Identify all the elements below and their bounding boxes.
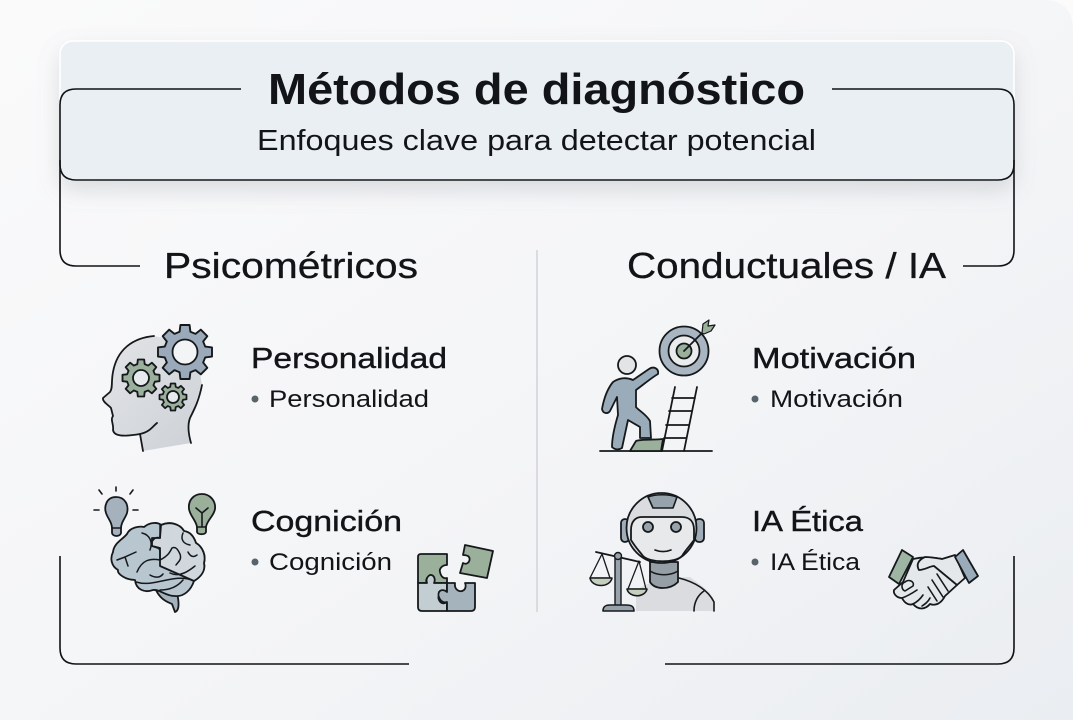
subtitle: Enfoques clave para detectar potencial xyxy=(257,125,816,157)
icon: brain with light bulbs xyxy=(94,487,215,612)
left frame line xyxy=(60,160,140,266)
ground line xyxy=(600,450,712,452)
green top-left piece xyxy=(418,554,447,583)
item title: Personalidad: Personalidad xyxy=(251,343,447,375)
mouth xyxy=(655,550,671,552)
face plate xyxy=(631,517,694,561)
torso xyxy=(636,577,714,611)
scales xyxy=(590,552,647,611)
grey bottom-right piece xyxy=(438,583,475,611)
body xyxy=(602,368,658,449)
green cuff xyxy=(889,550,913,584)
step xyxy=(630,439,663,451)
icon: head with gears xyxy=(103,325,212,451)
item title: Cognición: Cognición xyxy=(251,506,402,538)
eyes xyxy=(643,522,653,532)
icon: climber reaching target xyxy=(600,320,715,451)
item bullet: Motivación: Motivación xyxy=(770,386,903,413)
ears xyxy=(621,519,629,542)
bottom right frame line xyxy=(665,556,1014,664)
grey cuff xyxy=(955,550,978,583)
item bullet: IA Ética: IA Ética xyxy=(770,549,861,576)
brain body xyxy=(111,523,205,596)
icon: handshake xyxy=(889,550,978,608)
neck xyxy=(650,562,678,588)
grey bulb xyxy=(94,487,138,536)
green bulb xyxy=(189,494,215,534)
light bottom-left piece xyxy=(418,575,447,611)
medium gear xyxy=(122,360,160,396)
item bullet: Cognición: Cognición xyxy=(269,549,392,576)
column heading: Psicométricos: Psicométricos xyxy=(164,245,418,286)
hands xyxy=(894,555,965,608)
ladder xyxy=(662,387,697,451)
bottom left frame line xyxy=(60,556,409,664)
head xyxy=(618,356,636,374)
brain stem xyxy=(155,588,179,612)
column divider xyxy=(536,250,538,612)
target xyxy=(660,320,715,376)
head xyxy=(626,493,696,563)
right frame line xyxy=(963,160,1014,266)
icon: puzzle xyxy=(418,545,493,611)
top plate xyxy=(648,495,677,508)
item title: Motivación: Motivación xyxy=(752,343,916,375)
brain lobe xyxy=(152,523,205,581)
detached green piece xyxy=(460,545,493,578)
big gear xyxy=(158,325,212,379)
column heading: Conductuales / IA: Conductuales / IA xyxy=(627,245,946,286)
small gear xyxy=(160,384,186,410)
item bullet: Personalidad: Personalidad xyxy=(269,386,429,413)
item title: IA Ética: IA Ética xyxy=(752,505,864,538)
header panel xyxy=(60,41,1014,180)
title: Métodos de diagnóstico xyxy=(268,65,805,114)
icon: robot with scales xyxy=(590,493,714,611)
